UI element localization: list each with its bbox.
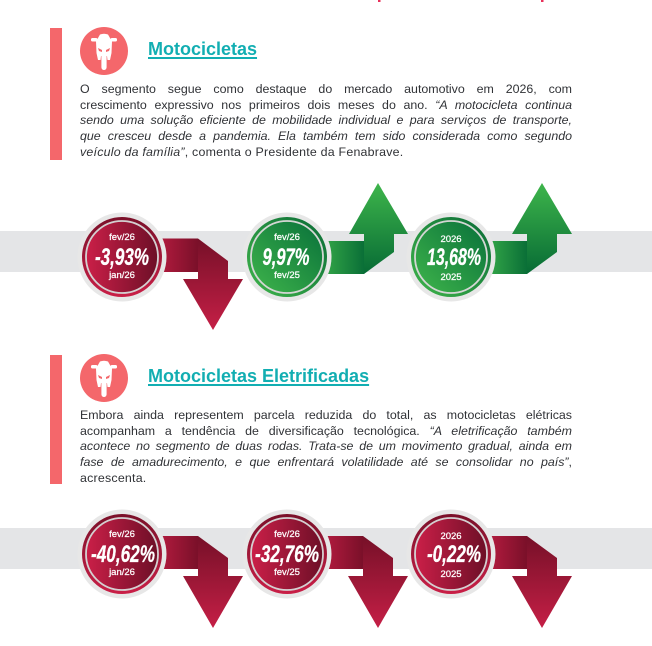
badge: -3,93%: -3,93% — [95, 244, 149, 271]
badge: 9,97%: 9,97% — [262, 244, 310, 271]
text block: Motocicletas — [80, 82, 572, 159]
badge: -40,62%: fev/26 — [109, 529, 135, 540]
badge: -3,93%: fev/26 — [109, 232, 135, 243]
band: row two — [0, 528, 652, 569]
text block: Motocicletas Eletrificadas — [80, 408, 572, 485]
badge: -3,93%: jan/26 — [108, 270, 135, 281]
badge: -40,62%: -40,62% — [91, 541, 155, 568]
badge: 13,68%: 13,68% — [427, 244, 481, 271]
badge: -32,76% — [242, 510, 332, 598]
icon: motorcycle — [80, 27, 128, 75]
badge: -0,22%: -0,22% — [427, 541, 481, 568]
text block: Motocicletas: que cresceu desde a pandemia. Ela também tem sido considerada como segundo — [80, 129, 572, 143]
badge: -32,76%: fev/25 — [274, 567, 300, 578]
badge: 13,68%: 2026 — [440, 234, 462, 245]
text block: Motocicletas Eletrificadas: acrescenta. — [80, 471, 146, 485]
accent bar: Motocicletas — [50, 28, 62, 160]
text block: Motocicletas Eletrificadas: fase de amadurecimento, e que enfrentará volatilidade até se consolidar no país”, — [80, 455, 572, 469]
heading: Motocicletas Eletrificadas: Motocicletas Eletrificadas — [148, 366, 369, 386]
band: row one — [0, 231, 652, 272]
arrow: down red 4 — [155, 536, 243, 628]
badge: -0,22% — [406, 510, 496, 598]
arrow: down red 1 — [155, 238, 243, 330]
badge: 9,97%: fev/25 — [274, 270, 300, 281]
badge: 13,68%: 2025 — [440, 272, 462, 283]
top edge marks — [378, 0, 544, 2]
text block: Motocicletas Eletrificadas: acontece no segmento de duas rodas. Trata-se de um movimento gradual, ainda em — [80, 439, 572, 453]
badge: 9,97% — [242, 212, 332, 302]
accent bar: Motocicletas Eletrificadas — [50, 355, 62, 484]
arrow: up green 2 — [320, 183, 408, 274]
arrow: down red 6 — [485, 536, 572, 628]
arrow: down red 5 — [320, 536, 408, 628]
badge: -40,62% — [78, 510, 166, 598]
badge: -40,62%: jan/26 — [108, 567, 135, 578]
badge: 9,97%: fev/26 — [274, 232, 300, 243]
heading: Motocicletas: Motocicletas — [148, 39, 257, 59]
badge: -0,22%: 2025 — [440, 569, 462, 580]
icon: electric motorcycle — [80, 354, 128, 402]
text block: Motocicletas: O segmento segue como destaque do mercado automotivo em 2026, com — [80, 82, 572, 96]
badge: -32,76%: -32,76% — [255, 541, 319, 568]
badge: 13,68% — [406, 212, 496, 302]
arrow: up green 3 — [485, 183, 572, 274]
badge: -32,76%: fev/26 — [274, 529, 300, 540]
text block: Motocicletas: sendo uma solução eficiente de mobilidade individual e para serviços de transporte, — [80, 113, 572, 127]
badge: -3,93% — [78, 212, 166, 302]
text block: Motocicletas: veículo da família”, comenta o Presidente da Fenabrave. — [80, 145, 403, 159]
text block: Motocicletas Eletrificadas: Embora ainda representem parcela reduzida do total, as motocicletas elétricas — [80, 408, 572, 422]
text block: Motocicletas Eletrificadas: acompanham a tendência de diversificação tecnológica. “A eletrificação também — [80, 424, 572, 438]
badge: -0,22%: 2026 — [440, 531, 462, 542]
text block: Motocicletas: crescimento expressivo nos primeiros dois meses do ano. “A motocicleta continua — [80, 98, 572, 112]
